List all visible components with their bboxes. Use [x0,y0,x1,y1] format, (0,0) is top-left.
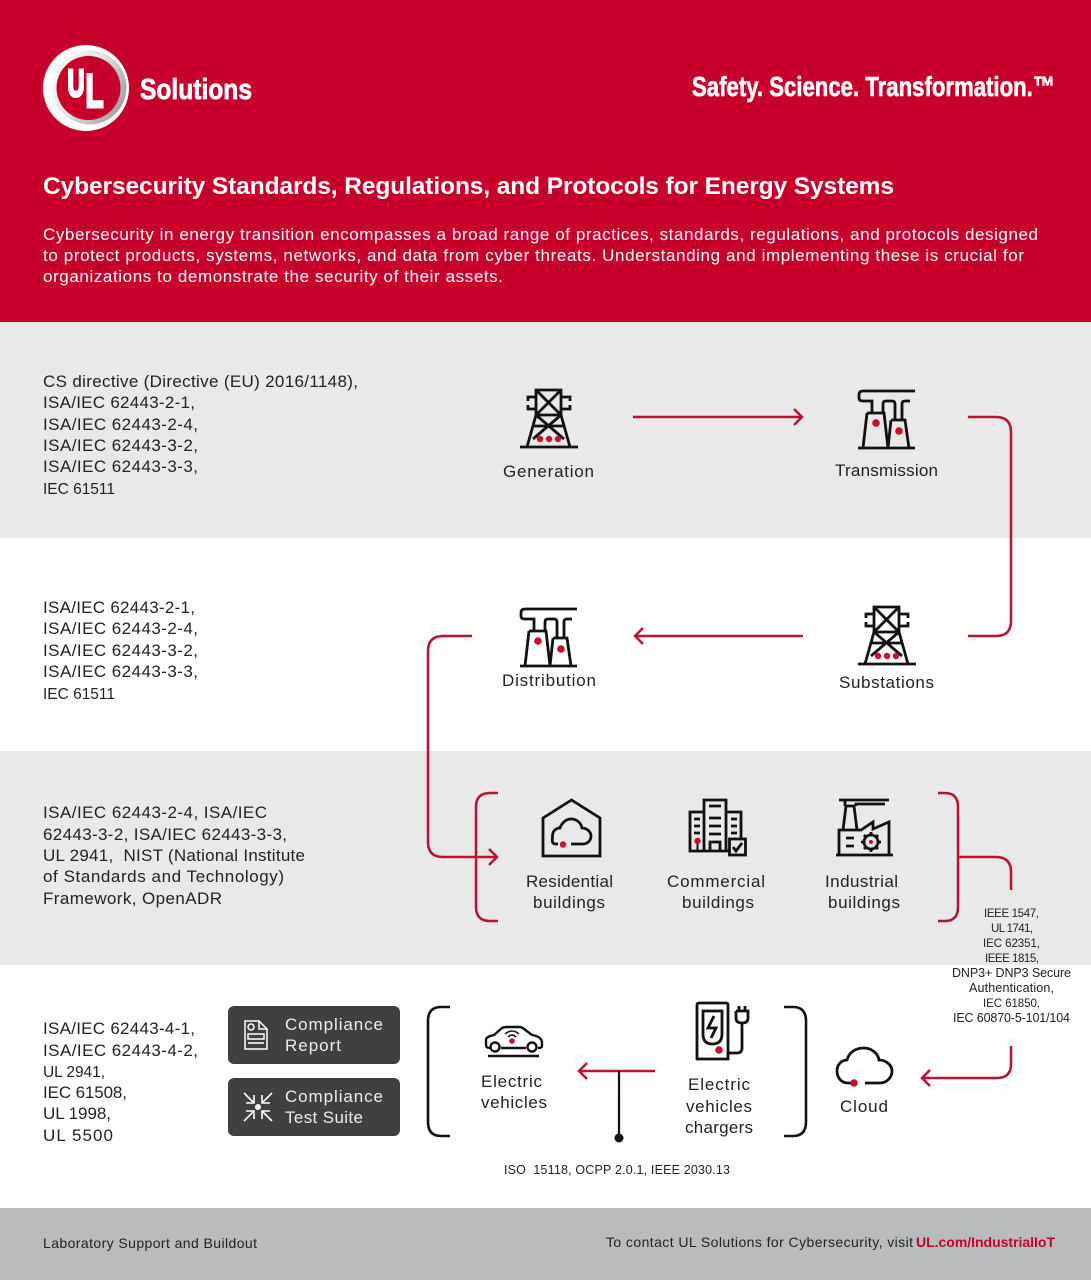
standards list: row 4: ISA/IEC 62443-4-2, [43,1041,198,1060]
row band: generation and transmission [0,322,1091,538]
node: Commercial buildings [667,800,765,912]
standards list: cloud connection: Authentication, [969,981,1054,995]
standards list: row 3: ISA/IEC 62443-2-4, ISA/IEC [43,803,267,822]
bracket: vehicles left [428,1007,450,1136]
intro paragraph [43,225,1038,286]
callout: Compliance Report: Compliance [285,1015,383,1034]
node: Generation: Generation [503,462,594,481]
logo: UL Solutions [43,45,252,131]
standards list: row 2: ISA/IEC 62443-2-1, [43,598,195,617]
node: Industrial buildings [825,800,900,912]
node: Electric vehicles chargers: chargers [685,1118,753,1137]
standards list: row 3: UL 2941, NIST (National Institute [43,846,305,865]
logo: UL Solutions: L [86,64,104,117]
standards list: row 2 [43,598,198,703]
node: Residential buildings [526,800,613,912]
footer contact text: To contact UL Solutions for Cybersecurity, visit [606,1234,913,1250]
node: Industrial buildings: buildings [828,893,900,912]
title: Cybersecurity Standards, Regulations, and Protocols for Energy Systems [43,173,894,200]
arrow: substations to distribution [635,628,803,644]
standards list: row 1: ISA/IEC 62443-3-3, [43,457,198,476]
header band [0,0,1091,322]
intro paragraph: organizations to demonstrate the security of their assets. [43,267,503,286]
footer band [0,1208,1091,1280]
standards list: row 4 [43,1019,198,1145]
node: Industrial buildings: Industrial [825,872,898,891]
node: Substations [839,607,934,692]
standards list: cloud connection: IEEE 1815, [985,953,1039,965]
callout: Compliance Test Suite: Compliance [285,1087,383,1106]
standards list: row 2: ISA/IEC 62443-3-3, [43,662,198,681]
intro paragraph: Cybersecurity in energy transition encompasses a broad range of practices, standards, regulations, and protocols designed [43,225,1038,244]
node: Transmission: Transmission [835,461,938,480]
protocol label: ISO 15118, OCPP 2.0.1, IEEE 2030.13 [504,1163,730,1177]
standards list: row 3 [43,803,305,908]
standards list: row 2: ISA/IEC 62443-2-4, [43,619,198,638]
callout: Compliance Test Suite [228,1078,400,1136]
icon: report document [245,1021,267,1049]
logo: UL Solutions: U [68,63,84,105]
callout: Compliance Report [228,1006,400,1064]
node: Transmission [835,391,938,480]
intro paragraph: to protect products, systems, networks, and data from cyber threats. Understanding and implementing these is crucial for [43,246,1024,265]
standards list: row 4: UL 2941, [43,1064,105,1081]
callout: Compliance Test Suite: Test Suite [285,1108,363,1127]
arrow: transmission to substations [968,417,1011,636]
node: Residential buildings: buildings [533,893,605,912]
standards list: row 1: IEC 61511 [43,481,115,498]
standards list: row 3: Framework, OpenADR [43,889,222,908]
node: Distribution [502,609,596,690]
bracket: buildings left [476,793,498,921]
node: Substations: Substations [839,673,934,692]
node: Electric vehicles [481,1027,547,1112]
standards list: row 4: UL 1998, [43,1104,111,1123]
standards list: cloud connection: UL 1741, [991,923,1033,935]
standards list: cloud connection: IEEE 1547, [984,908,1039,920]
node: Cloud [837,1048,892,1116]
standards list: row 1: CS directive (Directive (EU) 2016/1148), [43,372,358,391]
standards list: cloud connection: IEC 62351, [983,938,1040,950]
row band: buildings [0,751,1091,965]
node: Commercial buildings: Commercial [667,872,765,891]
standards list: row 3: of Standards and Technology) [43,867,284,886]
bracket: vehicles right [784,1007,806,1136]
arrow: distribution to buildings [428,636,497,865]
standards list: row 2: ISA/IEC 62443-3-2, [43,641,198,660]
node: Commercial buildings: buildings [682,893,754,912]
row band: distribution and substations [0,538,1091,751]
footer left text: Laboratory Support and Buildout [43,1235,257,1251]
node: Electric vehicles chargers [685,1003,753,1137]
row band: vehicles and cloud [0,965,1091,1208]
standards list: row 4: ISA/IEC 62443-4-1, [43,1019,195,1038]
standards list: row 4: UL 5500 [43,1126,113,1145]
node: Electric vehicles chargers: vehicles [686,1097,752,1116]
footer contact text [606,1234,1055,1250]
standards list: row 1: ISA/IEC 62443-3-2, [43,436,198,455]
standards list: row 2: IEC 61511 [43,686,115,703]
node: Generation [503,390,594,481]
node: Electric vehicles: Electric [481,1072,542,1091]
arrow: chargers to vehicles [579,1063,655,1079]
connector: charging protocols [614,1071,624,1142]
callout: Compliance Report: Report [285,1036,341,1055]
standards list: row 1: ISA/IEC 62443-2-4, [43,415,198,434]
standards list: cloud connection: IEC 61850, [983,998,1040,1010]
standards list: row 3: 62443-3-2, ISA/IEC 62443-3-3, [43,825,287,844]
standards list: row 1: ISA/IEC 62443-2-1, [43,393,195,412]
node: Electric vehicles chargers: Electric [688,1075,750,1094]
arrow: generation to transmission [633,409,802,425]
standards list: row 4: IEC 61508, [43,1083,127,1102]
standards list: row 1 [43,372,358,498]
node: Residential buildings: Residential [526,872,613,891]
node: Distribution: Distribution [502,671,596,690]
node: Electric vehicles: vehicles [481,1093,547,1112]
bracket: buildings right with connector [938,793,1011,921]
standards list: cloud connection: IEC 60870-5-101/104 [953,1011,1070,1025]
footer contact text: UL.com/IndustrialIoT [916,1234,1055,1250]
logo: UL Solutions: Solutions [140,74,252,106]
standards list: cloud connection [952,908,1071,1025]
node: Cloud: Cloud [840,1097,888,1116]
standards list: cloud connection: DNP3+ DNP3 Secure [952,966,1071,980]
icon: converging arrows [244,1093,272,1121]
arrow: standards to cloud [922,1046,1011,1086]
